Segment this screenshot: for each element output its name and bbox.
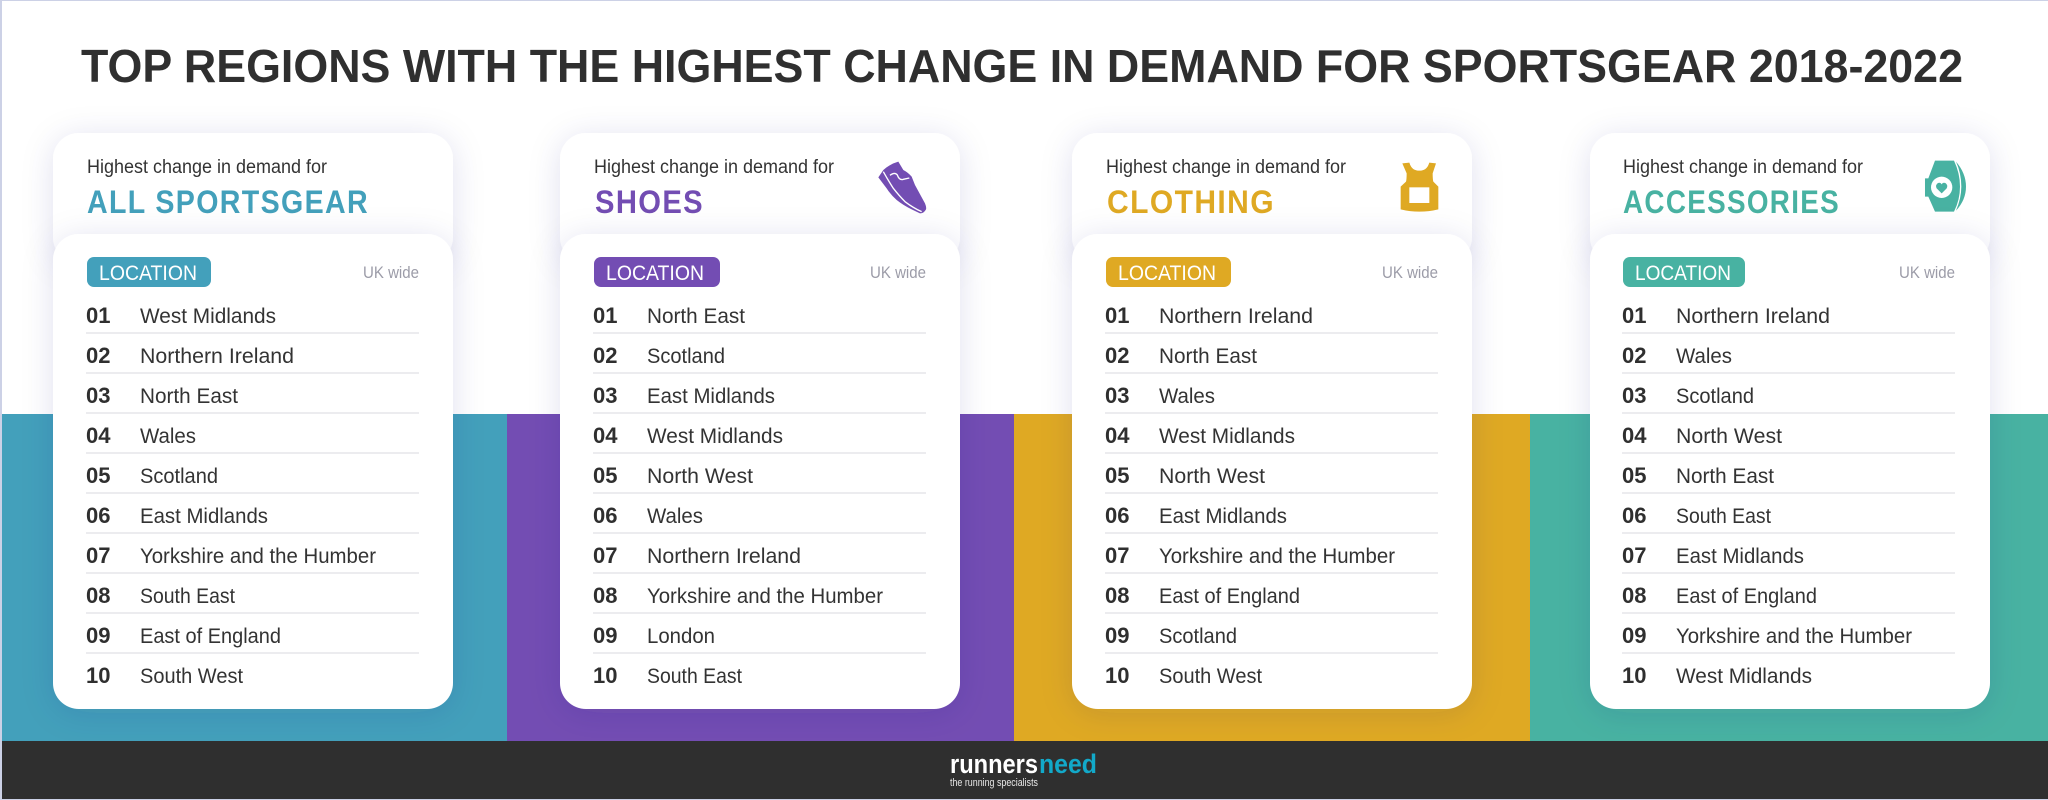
scope label: UK wide: [363, 263, 419, 282]
list card: [1590, 234, 1990, 709]
row 03: [1622, 383, 1754, 408]
row 03: [1105, 383, 1215, 408]
row 07: 07: [86, 543, 110, 568]
row 07: Yorkshire and the Humber: [1159, 545, 1395, 568]
row 01: 01: [1105, 303, 1129, 328]
row 10: West Midlands: [1676, 665, 1812, 688]
row 04: Wales: [140, 425, 196, 448]
row 08: Yorkshire and the Humber: [647, 585, 883, 608]
row 10: 10: [1105, 663, 1129, 688]
row 09: Scotland: [1159, 625, 1237, 648]
icon: smart watch: [1925, 161, 1966, 212]
row 06: [1622, 503, 1771, 528]
row 05: 05: [1105, 463, 1129, 488]
row 03: [593, 383, 775, 408]
row 05: [593, 463, 753, 488]
row 06: East Midlands: [1159, 505, 1287, 528]
row 03: East Midlands: [647, 385, 775, 408]
location tag: LOCATION: [1635, 262, 1731, 285]
scope label: UK wide: [1382, 263, 1438, 282]
header card: [53, 133, 453, 263]
row 05: [86, 463, 218, 488]
row 09: London: [647, 625, 715, 648]
row 10: 10: [1622, 663, 1646, 688]
row 09: [86, 623, 281, 648]
row 06: 06: [86, 503, 110, 528]
row 09: 09: [1622, 623, 1646, 648]
intro text: Highest change in demand for: [594, 157, 835, 178]
location tag: [594, 257, 720, 287]
row 04: West Midlands: [647, 425, 783, 448]
row 09: East of England: [140, 625, 281, 648]
panel: clothing: [1072, 133, 1472, 709]
title: TOP REGIONS WITH THE HIGHEST CHANGE IN DEMAND FOR SPORTSGEAR 2018-2022: [81, 40, 1963, 92]
row 05: 05: [593, 463, 617, 488]
row 06: East Midlands: [140, 505, 268, 528]
row 03: 03: [86, 383, 110, 408]
row 05: North West: [647, 465, 753, 488]
row 06: 06: [1105, 503, 1129, 528]
row 02: [1105, 343, 1257, 368]
row 04: 04: [1622, 423, 1647, 448]
row 10: [86, 663, 243, 688]
row 08: East of England: [1676, 585, 1817, 608]
row 06: 06: [593, 503, 617, 528]
row 04: West Midlands: [1159, 425, 1295, 448]
location tag: [87, 257, 211, 287]
row 05: [1622, 463, 1774, 488]
row 05: 05: [86, 463, 110, 488]
row 01: North East: [647, 305, 745, 328]
row 07: [593, 543, 801, 568]
row 09: Yorkshire and the Humber: [1676, 625, 1912, 648]
scope label: UK wide: [1899, 263, 1955, 282]
row 06: 06: [1622, 503, 1646, 528]
row 07: Northern Ireland: [647, 545, 801, 568]
intro text: Highest change in demand for: [1623, 157, 1864, 178]
row 04: [1105, 423, 1295, 448]
row 03: [86, 383, 238, 408]
row 03: 03: [1105, 383, 1129, 408]
colour band: all sportsgear: [2, 414, 507, 741]
row 07: [1622, 543, 1804, 568]
location tag: LOCATION: [1118, 262, 1216, 285]
row 04: 04: [593, 423, 618, 448]
row 02: 02: [1622, 343, 1646, 368]
logo: runners need: [950, 749, 1097, 789]
logo: runners need: runners: [950, 749, 1038, 779]
icon: running shoe: [878, 162, 926, 213]
scope label: UK wide: [870, 263, 926, 282]
row 04: 04: [86, 423, 111, 448]
row 02: Northern Ireland: [140, 345, 294, 368]
row 08: 08: [1622, 583, 1646, 608]
location tag: LOCATION: [606, 262, 704, 285]
row 04: 04: [1105, 423, 1130, 448]
row 08: East of England: [1159, 585, 1300, 608]
heading: ACCESSORIES: [1623, 184, 1840, 220]
row 01: [1622, 303, 1830, 328]
row 09: 09: [1105, 623, 1129, 648]
row 09: 09: [593, 623, 617, 648]
footer bar: [2, 741, 2048, 799]
row 03: Scotland: [1676, 385, 1754, 408]
row 06: [86, 503, 268, 528]
row 02: 02: [1105, 343, 1129, 368]
row 05: North West: [1159, 465, 1265, 488]
row 04: [1622, 423, 1782, 448]
panel: all sportsgear: [53, 133, 453, 709]
intro text: Highest change in demand for: [1106, 157, 1347, 178]
row 09: [1105, 623, 1237, 648]
row 10: [1105, 663, 1262, 688]
row 01: [593, 303, 745, 328]
row 06: [1105, 503, 1287, 528]
header card: [1590, 133, 1990, 263]
list card: [53, 234, 453, 709]
panel: shoes: [560, 133, 960, 709]
row 10: South East: [647, 665, 742, 688]
row 05: North East: [1676, 465, 1774, 488]
row 10: [1622, 663, 1812, 688]
row 10: [593, 663, 742, 688]
list card: [560, 234, 960, 709]
row 09: 09: [86, 623, 110, 648]
colour band: clothing: [1014, 414, 1530, 741]
row 04: [593, 423, 783, 448]
row 07: 07: [593, 543, 617, 568]
row 08: 08: [1105, 583, 1129, 608]
row 01: 01: [86, 303, 110, 328]
row 01: Northern Ireland: [1159, 305, 1313, 328]
list card: [1072, 234, 1472, 709]
logo: runners need: the running specialists: [950, 777, 1038, 789]
row 02: Scotland: [647, 345, 725, 368]
row 01: [86, 303, 276, 328]
row 02: [1622, 343, 1732, 368]
row 07: 07: [1105, 543, 1129, 568]
location tag: LOCATION: [99, 262, 197, 285]
row 08: [1105, 583, 1300, 608]
colour band: shoes: [507, 414, 1014, 741]
row 10: 10: [593, 663, 617, 688]
row 06: [593, 503, 703, 528]
row 02: 02: [86, 343, 110, 368]
row 01: Northern Ireland: [1676, 305, 1830, 328]
row 04: [86, 423, 196, 448]
row 08: 08: [593, 583, 617, 608]
row 08: South East: [140, 585, 235, 608]
row 05: 05: [1622, 463, 1646, 488]
row 03: 03: [1622, 383, 1646, 408]
row 08: 08: [86, 583, 110, 608]
row 03: 03: [593, 383, 617, 408]
header card: [1072, 133, 1472, 263]
intro text: Highest change in demand for: [87, 157, 328, 178]
row 10: South West: [140, 665, 243, 688]
icon: running vest: [1401, 163, 1438, 212]
panel: accessories: [1590, 133, 1990, 709]
row 07: 07: [1622, 543, 1646, 568]
row 02: Wales: [1676, 345, 1732, 368]
heading: CLOTHING: [1107, 184, 1275, 220]
row 01: [1105, 303, 1313, 328]
row 10: 10: [86, 663, 110, 688]
location tag: [1623, 257, 1745, 287]
row 01: West Midlands: [140, 305, 276, 328]
row 01: 01: [1622, 303, 1646, 328]
row 03: Wales: [1159, 385, 1215, 408]
header card: [560, 133, 960, 263]
row 09: [593, 623, 715, 648]
row 06: South East: [1676, 505, 1771, 528]
row 03: North East: [140, 385, 238, 408]
logo: runners need: need: [1039, 749, 1097, 779]
row 06: Wales: [647, 505, 703, 528]
row 02: [593, 343, 725, 368]
heading: ALL SPORTSGEAR: [87, 184, 369, 220]
row 02: 02: [593, 343, 617, 368]
row 08: [86, 583, 235, 608]
row 02: North East: [1159, 345, 1257, 368]
row 10: South West: [1159, 665, 1262, 688]
row 05: Scotland: [140, 465, 218, 488]
colour band: accessories: [1530, 414, 2048, 741]
row 07: East Midlands: [1676, 545, 1804, 568]
row 04: North West: [1676, 425, 1782, 448]
row 08: [1622, 583, 1817, 608]
row 02: [86, 343, 294, 368]
heading: SHOES: [595, 184, 704, 220]
row 01: 01: [593, 303, 617, 328]
row 05: [1105, 463, 1265, 488]
location tag: [1106, 257, 1231, 287]
row 07: Yorkshire and the Humber: [140, 545, 376, 568]
